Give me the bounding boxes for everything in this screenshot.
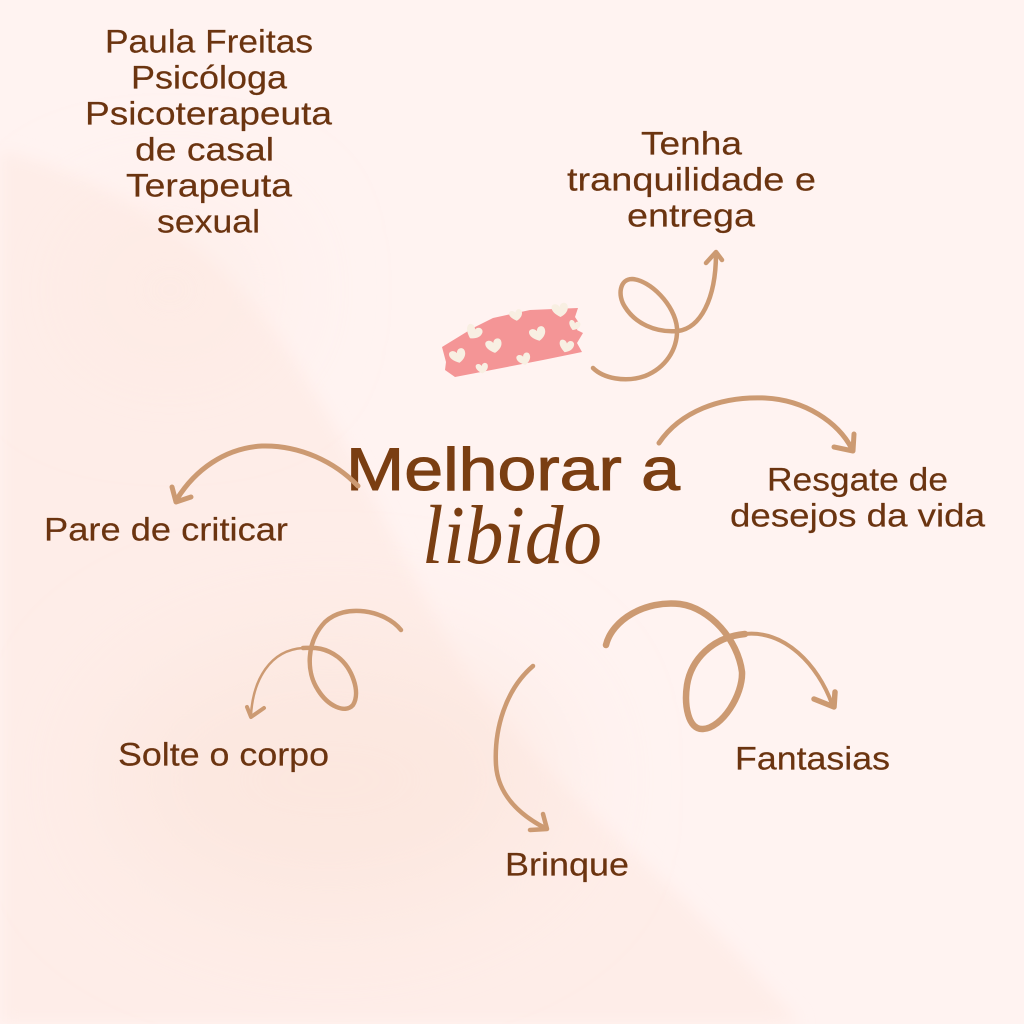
text block: author credentials: de casal: [135, 132, 274, 168]
label: Tenha tranquilidade e entrega: Tenha: [641, 126, 743, 162]
label: Resgate de desejos da vida: [730, 462, 986, 534]
text block: author credentials: Terapeuta: [126, 168, 293, 204]
label: Resgate de desejos da vida: desejos da vida: [730, 498, 986, 534]
title: Melhorar a: [346, 436, 681, 503]
icon: washi tape with hearts: [442, 302, 583, 377]
label: Brinque: Brinque: [505, 846, 629, 882]
arrow: to Brinque: [496, 666, 547, 830]
text block: author credentials: [85, 24, 333, 240]
text block: author credentials: Paula Freitas: [105, 24, 313, 60]
title: [346, 436, 681, 582]
arrow: to Pare de criticar: [172, 446, 358, 502]
label: Pare de criticar: Pare de criticar: [44, 512, 288, 548]
arrow: to Fantasias: [606, 603, 835, 729]
label: Resgate de desejos da vida: Resgate de: [767, 462, 948, 498]
text block: author credentials: sexual: [157, 204, 260, 240]
label: Tenha tranquilidade e entrega: entrega: [627, 198, 756, 234]
title: libido: [422, 489, 602, 582]
text block: author credentials: Psicóloga: [131, 60, 288, 96]
label: Fantasias: Fantasias: [735, 740, 890, 776]
text block: author credentials: Psicoterapeuta: [85, 96, 333, 132]
label: Solte o corpo: Solte o corpo: [118, 736, 329, 772]
label: Tenha tranquilidade e entrega: [567, 126, 816, 234]
arrow: to Solte o corpo: [247, 611, 401, 717]
label: Tenha tranquilidade e entrega: tranquilidade e: [567, 162, 816, 198]
arrow: to Resgate de desejos: [659, 398, 854, 451]
arrow: to Tenha tranquilidade: [593, 252, 722, 379]
